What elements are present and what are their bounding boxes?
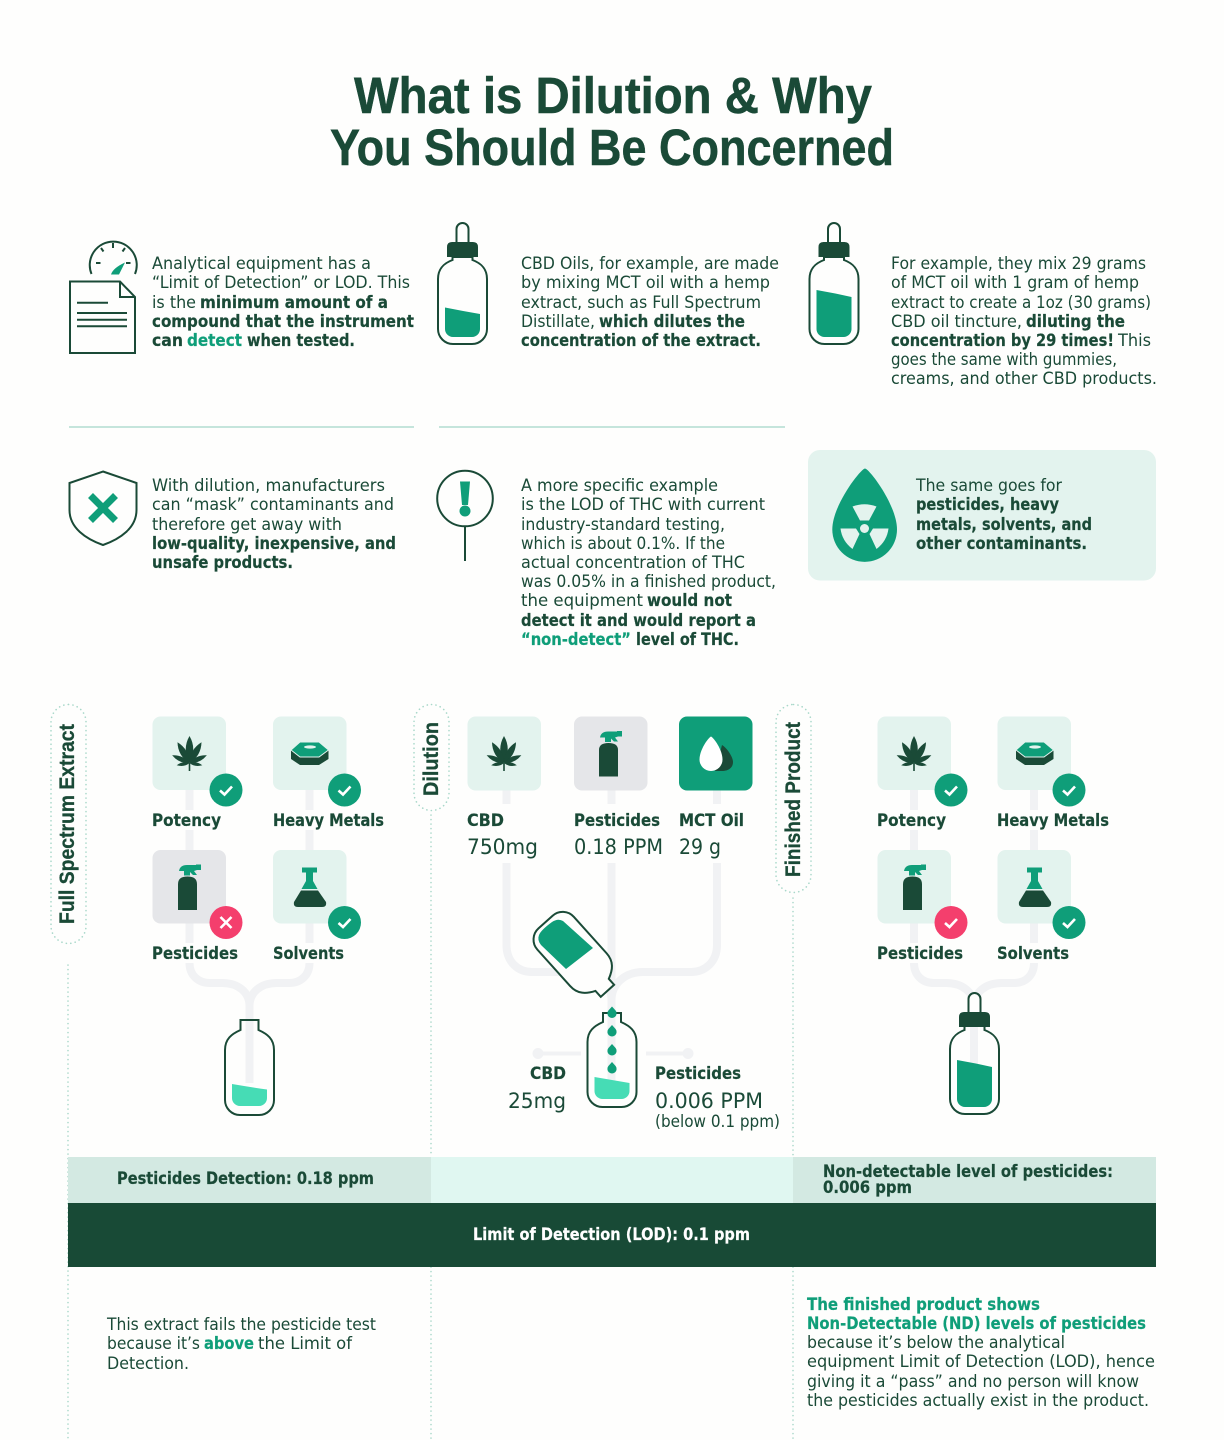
- card: mct oil: [679, 716, 752, 859]
- icon: radiation drop: [832, 468, 897, 562]
- text block: masking contaminants: therefore get away with: [152, 514, 342, 534]
- text block: mix example: CBD oil tincture,: [891, 311, 1022, 331]
- text block: limit of detection: is the: [152, 292, 196, 312]
- text block: limit of detection: can: [152, 331, 183, 350]
- card: pesticides: [574, 716, 663, 859]
- card: cbd: [467, 716, 541, 859]
- card: heavy metals: Heavy Metals: [273, 811, 384, 830]
- text block: mix example: extract to create a 1oz (30 grams): [891, 292, 1151, 312]
- text block: cbd oils: by mixing MCT oil with a hemp: [521, 272, 770, 292]
- icon: finished dropper bottle: [950, 993, 999, 1114]
- card: potency: Potency: [877, 811, 946, 830]
- text block: extract fails: This extract fails the pesticide test: [106, 1314, 376, 1334]
- icon: shield with x: [70, 472, 136, 545]
- card: pesticides: Pesticides: [877, 944, 963, 963]
- band: non-detectable level: Non-detectable level of pesticides:: [823, 1162, 1113, 1181]
- text block: cbd oils: which dilutes the: [599, 312, 745, 331]
- card: potency: Potency: [152, 811, 221, 830]
- result: pesticides: (below 0.1 ppm): [655, 1111, 780, 1131]
- card: mct oil: MCT Oil: [679, 811, 744, 830]
- text block: extract fails: because it’s: [107, 1333, 200, 1353]
- text block: limit of detection: minimum amount of a: [200, 293, 388, 312]
- card: solvents: [273, 850, 361, 963]
- text block: thc example: level of THC.: [636, 630, 739, 649]
- icon: dropper bottle high fill: [810, 223, 858, 344]
- text block: cbd oils: [521, 253, 779, 350]
- card: pesticides: [152, 850, 242, 963]
- title: What is Dilution & Why: [354, 67, 873, 124]
- text block: thc example: “non-detect”: [521, 630, 631, 649]
- card: heavy metals: [273, 716, 384, 830]
- result: cbd: 25mg: [508, 1089, 566, 1113]
- panel text: The same goes for: [915, 475, 1062, 495]
- panel: other contaminants: [808, 450, 1156, 580]
- text block: thc example: which is about 0.1%. If the: [521, 533, 725, 553]
- text block: extract fails: [106, 1314, 376, 1373]
- text block: thc example: actual concentration of THC: [521, 552, 745, 572]
- result: pesticides: 0.006 PPM: [655, 1089, 763, 1113]
- text block: cbd oils: CBD Oils, for example, are made: [521, 253, 779, 273]
- text block: masking contaminants: unsafe products.: [152, 553, 293, 572]
- icon: receiving bottle with drops: [588, 1006, 636, 1107]
- icon: extract bottle: [225, 1020, 274, 1115]
- text block: masking contaminants: low-quality, inexpensive, and: [152, 534, 396, 553]
- text block: limit of detection: when tested.: [247, 331, 355, 350]
- band: non-detectable level: 0.006 ppm: [823, 1178, 912, 1197]
- connector pipes: [190, 790, 310, 1083]
- text block: thc example: was 0.05% in a finished product,: [521, 571, 776, 591]
- card: solvents: [997, 850, 1086, 963]
- icon: tilted pouring bottle: [527, 906, 626, 1007]
- icon: exclamation sign: [437, 471, 493, 561]
- text block: mix example: diluting the: [1026, 312, 1125, 331]
- column label: full spectrum extract: Full Spectrum Extract: [56, 724, 79, 924]
- text block: cbd oils: extract, such as Full Spectrum: [521, 292, 761, 312]
- column label: dilution: Dilution: [420, 722, 443, 796]
- band: limit of detection: Limit of Detection (LOD): 0.1 ppm: [473, 1225, 750, 1244]
- text block: mix example: goes the same with gummies,: [891, 349, 1117, 369]
- band: non-detectable level: [793, 1157, 1156, 1203]
- text block: thc example: [521, 475, 776, 649]
- text block: thc example: is the LOD of THC with current: [521, 494, 765, 514]
- text block: thc example: would not: [647, 591, 732, 610]
- text block: mix example: of MCT oil with 1 gram of hemp: [891, 272, 1139, 292]
- text block: mix example: For example, they mix 29 grams: [891, 253, 1146, 273]
- card: cbd: CBD: [467, 811, 504, 830]
- result: cbd: CBD: [530, 1064, 566, 1083]
- text block: masking contaminants: With dilution, manufacturers: [152, 475, 385, 495]
- card: potency: [152, 716, 242, 830]
- card: pesticides: [877, 850, 968, 963]
- icon: dropper bottle low fill: [438, 223, 487, 344]
- connector pipes: [914, 790, 1034, 1083]
- text block: finished product shows: equipment Limit of Detection (LOD), hence: [807, 1351, 1155, 1371]
- text block: finished product shows: the pesticides actually exist in the product.: [807, 1390, 1149, 1410]
- panel: dilution flow: [467, 716, 780, 1131]
- band: pesticides detection: Pesticides Detection: 0.18 ppm: [117, 1169, 374, 1188]
- panel text: [915, 475, 1092, 553]
- panel text: metals, solvents, and: [916, 515, 1092, 534]
- text block: finished product shows: because it’s below the analytical: [807, 1332, 1065, 1352]
- band: limit of detection: [68, 1203, 1156, 1267]
- card: heavy metals: Heavy Metals: [997, 811, 1109, 830]
- panel: full spectrum extract flow: [152, 716, 384, 1115]
- icon: gauge and document: [70, 242, 137, 353]
- card: cbd: 750mg: [467, 835, 538, 859]
- text block: finished product shows: [807, 1295, 1155, 1410]
- card: potency: [877, 716, 968, 830]
- text block: finished product shows: Non-Detectable (ND) levels of pesticides: [807, 1314, 1146, 1333]
- text block: extract fails: above: [204, 1334, 254, 1353]
- title: [330, 67, 894, 176]
- text block: extract fails: Detection.: [107, 1353, 189, 1373]
- text block: thc example: the equipment: [521, 590, 643, 610]
- panel text: pesticides, heavy: [916, 495, 1059, 514]
- text block: cbd oils: Distillate,: [521, 311, 595, 331]
- text block: mix example: concentration by 29 times!: [891, 331, 1114, 350]
- text block: thc example: detect it and would report a: [521, 611, 756, 630]
- text block: finished product shows: giving it a “pass” and no person will know: [807, 1371, 1139, 1391]
- panel text: other contaminants.: [916, 534, 1087, 553]
- column label: finished product: Finished Product: [782, 722, 805, 877]
- card: mct oil: 29 g: [679, 835, 721, 859]
- card: pesticides: Pesticides: [574, 811, 660, 830]
- text block: extract fails: the Limit of: [258, 1333, 353, 1353]
- connector pipes: [506, 790, 717, 1090]
- text block: limit of detection: [152, 253, 414, 350]
- result: cbd: [508, 1048, 688, 1113]
- text block: masking contaminants: can “mask” contaminants and: [152, 494, 394, 514]
- card: solvents: Solvents: [997, 944, 1069, 963]
- band: pesticides detection: [68, 1157, 431, 1203]
- text block: limit of detection: Analytical equipment has a: [152, 253, 371, 273]
- text block: finished product shows: The finished product shows: [807, 1295, 1040, 1314]
- panel: finished product flow: [877, 716, 1109, 1114]
- text block: limit of detection: compound that the instrument: [152, 312, 414, 331]
- card: pesticides: 0.18 PPM: [574, 835, 663, 859]
- card: pesticides: Pesticides: [152, 944, 238, 963]
- column label: full spectrum extract: [51, 704, 86, 944]
- card: heavy metals: [997, 716, 1109, 830]
- text block: mix example: [891, 253, 1157, 388]
- result: pesticides: [655, 1048, 780, 1131]
- text block: thc example: industry-standard testing,: [521, 514, 725, 534]
- text block: cbd oils: concentration of the extract.: [521, 331, 761, 350]
- text block: limit of detection: detect: [187, 331, 242, 350]
- result: pesticides: Pesticides: [655, 1064, 741, 1083]
- text block: mix example: creams, and other CBD products.: [891, 368, 1157, 388]
- column label: dilution: [414, 704, 449, 810]
- text block: masking contaminants: [152, 475, 396, 572]
- text block: mix example: This: [1117, 330, 1151, 350]
- card: solvents: Solvents: [273, 944, 344, 963]
- title: You Should Be Concerned: [330, 119, 894, 176]
- text block: thc example: A more specific example: [521, 475, 718, 495]
- text block: limit of detection: “Limit of Detection” or LOD. This: [152, 272, 410, 292]
- column label: finished product: [776, 704, 811, 892]
